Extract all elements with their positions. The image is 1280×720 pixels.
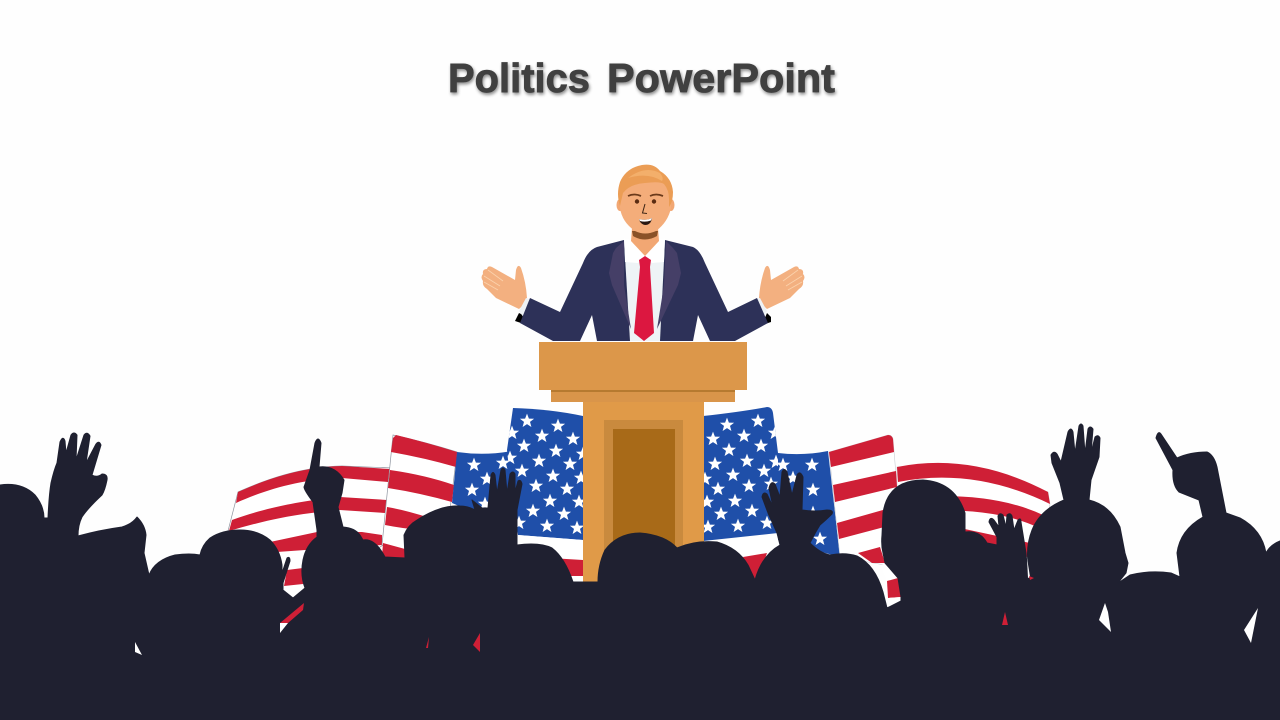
speaker: head bbox=[616, 165, 674, 234]
podium: inner panel bbox=[613, 429, 675, 582]
speaker: nose bbox=[642, 204, 647, 214]
speaker: lapels bbox=[609, 241, 681, 329]
speaker: collar bbox=[624, 238, 665, 263]
speaker: hair highlight bbox=[628, 170, 663, 181]
speaker: shirt bbox=[624, 240, 665, 341]
flag: left stripes panel bbox=[382, 435, 457, 560]
gaps in crowd bbox=[135, 558, 1258, 655]
speaker: white sleeves bbox=[519, 298, 767, 318]
speaker: mouth bbox=[639, 218, 652, 225]
flag: lower right tail bbox=[880, 563, 901, 608]
speaker: left hand bbox=[482, 266, 527, 309]
flag: left stars canton bbox=[452, 408, 590, 582]
speaker: red tie bbox=[634, 256, 654, 341]
speaker: suit jacket bbox=[520, 240, 768, 341]
speaker: neck bbox=[631, 228, 659, 256]
american flag bbox=[228, 407, 1050, 608]
speaker: teeth bbox=[639, 218, 652, 222]
speaker: ears bbox=[616, 199, 674, 211]
speaker: shirt cuffs bbox=[515, 313, 771, 325]
podium: recessed panel bbox=[604, 420, 683, 582]
speaker: eyebrows bbox=[628, 194, 663, 196]
speaker: neck shadow bbox=[632, 231, 658, 240]
crowd silhouette bbox=[0, 424, 1280, 720]
flag: far left arc bbox=[228, 466, 393, 600]
title: Politics bbox=[448, 55, 590, 101]
podium bbox=[539, 342, 747, 582]
podium: ledge bbox=[551, 390, 735, 402]
speaker: face bbox=[620, 175, 671, 234]
title: PowerPoint bbox=[607, 55, 835, 101]
speaker: right hand bbox=[759, 266, 804, 309]
flag: right stars canton bbox=[698, 407, 840, 582]
speaker bbox=[482, 165, 804, 341]
podium: column bbox=[583, 402, 704, 582]
flag: far right arc bbox=[897, 463, 1050, 582]
podium: top block bbox=[539, 342, 747, 390]
flag: right stripes panel bbox=[829, 435, 897, 565]
speaker: eyes bbox=[635, 199, 656, 204]
speaker: hair bbox=[618, 165, 673, 207]
podium: ledge shadow bbox=[551, 389, 735, 392]
